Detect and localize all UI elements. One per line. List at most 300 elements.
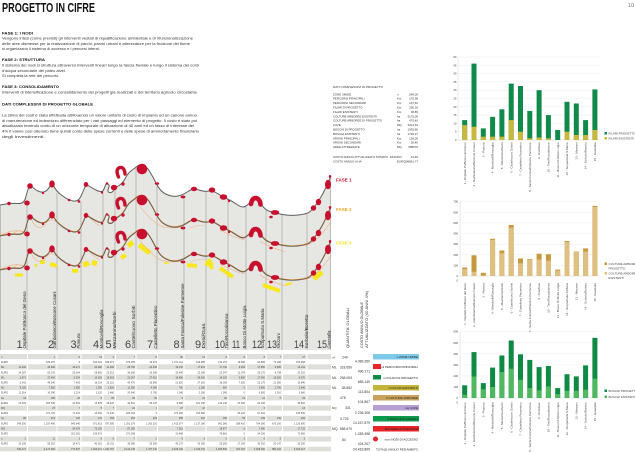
table values: 3.680 (299, 392, 306, 395)
legend: table categories (373, 354, 419, 452)
chart 3 category labels: 1 - Ospitale Po/Bosco del Geso (463, 402, 467, 444)
phase labels (336, 178, 352, 246)
table values: 11 (52, 438, 56, 441)
chart 1 category labels: 10 - Tino/Roccabianca (546, 142, 550, 172)
chart 1 gridlines and axis: 35 (453, 80, 457, 84)
global quantities and costs: 2.236.308 (355, 411, 370, 415)
table values: 3.510 (275, 392, 282, 395)
table values: 1.260 (96, 387, 103, 390)
table values: 78.881 (219, 432, 228, 436)
table values: 3.871 (20, 376, 27, 379)
table values: 101.150 (196, 402, 206, 405)
table values: 1.137.280 (194, 422, 206, 425)
table values: 6 (79, 356, 81, 359)
table values: 784.380 (256, 422, 266, 425)
data table: dati complessivi di progetto: CAVE (333, 123, 341, 127)
table values: 10.840 (297, 382, 306, 384)
global quantities and costs: 558.670 (340, 427, 352, 431)
table values: 254 (131, 417, 136, 420)
table values: 2.640 (299, 387, 306, 390)
table values: 30.120 (237, 412, 246, 415)
table values: 6.820 (259, 392, 266, 395)
text block: dati complessivi: La stima dei costi è stata effettuata attribuendo un valore unitario di costo di impianto ed un canone annuo (2, 114, 197, 118)
table values: 45 (154, 397, 158, 400)
chart 1 legend: FILARI ESISTENTI (608, 136, 634, 140)
table values: 14.460 (94, 412, 103, 415)
table values: 17.732 (297, 427, 306, 430)
data table: dati complessivi di progetto: Km (397, 141, 402, 145)
table values: 2.108.100 (172, 448, 184, 451)
table values: 11.514 (19, 392, 27, 395)
segment names (22, 283, 332, 348)
table values: 24.440 (149, 366, 158, 369)
table values: 71.430 (106, 412, 115, 415)
chart 1 gridlines and axis: 0 (455, 138, 457, 142)
segment numbers: 10 (215, 339, 225, 351)
table values: 120 (76, 417, 81, 420)
table values: 18.360 (219, 382, 228, 384)
table values: EURO (1, 422, 8, 425)
table values: EURO (1, 392, 8, 395)
table values: 73.150 (94, 427, 103, 430)
table values: 55 (242, 417, 246, 420)
table values: 255 (179, 417, 184, 420)
table values: 153 (110, 417, 115, 420)
chart 3 category labels: 14 - Sorbolo/Boretto (584, 402, 588, 429)
table values: EURO (1, 412, 8, 415)
table values: 12 (202, 356, 206, 359)
data table: dati complessivi di progetto: PERCORSI PRINCIPALI (333, 97, 365, 101)
segment names: Guastalla (326, 330, 332, 348)
table values: 130 (277, 417, 282, 420)
table values: 3 (79, 438, 81, 441)
chart 3 category labels: 5 - Mezzanino/Sorbi (500, 402, 504, 429)
table values: 40.470 (127, 382, 136, 384)
table values: 11.078 (238, 371, 246, 374)
segment numbers: 2 (48, 339, 54, 351)
table column headers: ATTUALIZZATO (40 ANNI 4%) (364, 290, 369, 348)
table values: 11.350 (128, 387, 136, 390)
table values: 192.021 (93, 361, 103, 364)
table values: EURO (1, 443, 8, 446)
table values: 1.729.710 (194, 448, 206, 451)
global quantities and costs: ML (332, 366, 337, 370)
segment names: Gainbolanca/Boscone Cusani (52, 291, 57, 348)
table values: 20.210 (297, 371, 306, 374)
global quantities and costs: MQ (332, 406, 337, 410)
table values: ha (1, 397, 4, 400)
data table: dati complessivi di progetto: n (397, 92, 399, 96)
table values: 971.813 (93, 422, 103, 425)
table values: 45.620 (297, 402, 306, 405)
table values: 371.396 (126, 432, 136, 436)
table values: 2.112.139 (124, 448, 136, 451)
text block: fase 1: FASE 1: I NODI (2, 32, 33, 36)
chart 1 legend (604, 132, 635, 140)
table values: 1.071.110 (172, 361, 184, 364)
text block: fase 2 (2, 58, 199, 78)
table values: 5 (101, 407, 103, 410)
segment names: Ospitale Po/Bosco del Geso (22, 291, 27, 348)
chart 3 gridlines and axis (453, 330, 598, 404)
global quantities and costs: 1.283.498 (355, 432, 370, 436)
segment names: Pianura (76, 333, 81, 348)
table values: 27.451 (149, 376, 158, 379)
segment names: Dosi/Gas (201, 324, 206, 348)
table values: 8.320 (20, 387, 27, 390)
chart 1 gridlines and axis: 50 (453, 55, 457, 59)
chart 3 legend (604, 389, 635, 399)
legend: table categories: num NODI DI ACCESSO (385, 438, 419, 442)
chart 2 category labels: 15 - Guastalla (593, 283, 597, 302)
chart 3 category labels: 13 - Mezzani (574, 402, 578, 420)
text block: fase 3: Interventi di intensificazione e consolidamento dei progetti già realizzati e del territorio agricolo circostante (2, 90, 197, 94)
table values: 35.200 (297, 443, 306, 446)
table values: 3 (244, 438, 246, 441)
chart 2 gridlines and axis (453, 200, 598, 282)
table values: 289.410 (236, 422, 246, 425)
table values: 12 (242, 397, 246, 400)
chart 2 category labels: 14 - Sorbolo/Boretto (584, 283, 588, 310)
text block: fase 1 (2, 32, 193, 51)
table values: 35.380 (127, 443, 136, 446)
segment numbers: 8 (173, 339, 180, 351)
data table: dati complessivi di progetto: 24,40 (411, 155, 418, 159)
global quantities and costs: MQ (332, 427, 338, 431)
chart 1 legend: FILARI PROGETTO (608, 132, 635, 136)
segment names: Bosco Di Motte Luigia (242, 305, 247, 348)
table values: 20.200 (257, 402, 266, 405)
table values: 17.100 (237, 443, 246, 446)
table values: 46.072 (149, 361, 158, 364)
global quantities and costs: 3.725 (340, 417, 349, 421)
segment numbers: 3 (70, 339, 77, 351)
table values: 278.355 (126, 361, 136, 364)
table values: 0 (244, 387, 246, 390)
table values: n (1, 438, 3, 441)
table values: 5 (182, 397, 184, 400)
segment numbers: 4 (93, 339, 99, 351)
table values: 600 (223, 387, 228, 390)
table values: 60 (224, 397, 228, 400)
segment names: Mezzanino/Sorbi (112, 311, 117, 348)
segment numbers (16, 339, 327, 351)
table values: 23.170 (257, 382, 266, 384)
table values: 1.029.450 (254, 448, 266, 451)
table values: ML (1, 376, 5, 379)
bar chart: colture arboree (453, 200, 635, 332)
text block: dati complessivi: di manutenzione ed indennizzo differenziato per i vari passaggi ed elemento di progetto. Il costo è stato poi (2, 119, 197, 123)
table values: 1.280 (199, 387, 206, 390)
table values: 2.790 (275, 387, 282, 390)
data table: quantities by segment (0, 352, 331, 452)
table values: 1.263.210 (146, 422, 158, 425)
table values: 25.170 (257, 371, 266, 374)
table column headers: QUANTITA' GLOBALI (345, 308, 350, 348)
table values: 1.495.800 (216, 448, 228, 451)
legend: table categories: TOTALE ANNUO PER AMBITO (376, 448, 419, 452)
global quantities and costs: 38.852 (342, 386, 352, 390)
table values: 229 (153, 417, 158, 420)
segment numbers: 1 (16, 339, 23, 351)
chart 1 category labels: 1 - Ospitale Po/Bosco del Geso (463, 142, 467, 184)
table values: 8 (182, 438, 184, 441)
table values: ML (1, 366, 5, 369)
table values: 1.326.471 (91, 448, 103, 451)
table values: 18.214 (94, 382, 103, 384)
segment numbers: 9 (195, 339, 201, 351)
table values: 7 (113, 407, 115, 410)
table values: 12 (262, 397, 266, 400)
chart 2 gridlines and axis: 500 (453, 221, 458, 225)
table values: 16.680 (175, 376, 184, 379)
table values: 22 (132, 407, 136, 410)
table values: 5 (280, 438, 282, 441)
chart 3 category labels: 6 - Castelnuovo Sorbiti (509, 402, 513, 433)
chart 2 category labels: 3 - Pianura (481, 283, 485, 298)
table values: 2.260 (199, 392, 206, 395)
global quantities and costs: 104.867 (358, 400, 370, 404)
chart 3 category labels: 9 - Dosi/Gas (537, 402, 541, 419)
data table: dati complessivi di progetto: BOSCHI DI PROGETTO (333, 128, 365, 132)
table values: 65.141 (47, 371, 56, 374)
table values: 55.310 (47, 443, 56, 446)
segment names: Castelnuovo Sorbiti (131, 305, 136, 348)
table values: 7 (79, 407, 81, 410)
table stripes (0, 354, 331, 451)
segment names: Monticelli/Roncaglia (99, 309, 104, 348)
text block: fase 1: si organizzano il sistema di accesso e i percorsi interni. (2, 47, 100, 51)
data table: dati complessivi di progetto: 1730,27 (408, 132, 418, 136)
table values: EURO (1, 402, 8, 405)
global quantities and costs: 84 (342, 438, 346, 442)
chart 3 gridlines and axis: 200 (453, 374, 458, 378)
chart 3 bars: boschi esistenti (462, 369, 597, 398)
table values: 7.590 (259, 427, 266, 430)
table values: ML (1, 387, 5, 390)
table values: 10.390 (47, 392, 56, 395)
chart 2 category labels: 9 - Dosi/Gas (537, 283, 541, 300)
table values: 2.480 (108, 392, 115, 395)
table values: 37.010 (197, 382, 206, 384)
chart 2 gridlines and axis: 600 (453, 210, 458, 214)
segment numbers: 14 (294, 339, 304, 351)
table values: 180 (223, 417, 228, 420)
table values: 46.930 (47, 366, 56, 369)
segment numbers: 6 (125, 339, 131, 351)
table values: 7 (280, 356, 282, 359)
table values: 0 (244, 427, 246, 430)
chart 2 bars: colture esistenti (462, 207, 597, 276)
table values: 15.471 (72, 443, 81, 446)
table values: 24 (202, 397, 206, 400)
river profile panel (0, 164, 352, 351)
chart 2 gridlines and axis: 0 (456, 274, 458, 278)
table values: 700 (179, 387, 184, 390)
table values: 22.180 (197, 371, 206, 374)
chart 3 gridlines and axis: 300 (453, 363, 458, 367)
table values: 1.477.311 (146, 448, 158, 451)
global quantities and costs: 685.149 (358, 380, 370, 384)
table values: 21.050 (273, 382, 282, 384)
table values: 37.460 (47, 376, 56, 379)
chart 3 gridlines and axis: 600 (453, 330, 458, 334)
table values: 40.010 (94, 443, 103, 446)
global quantities and costs (332, 356, 370, 452)
chart 3 gridlines and axis: 400 (453, 352, 458, 356)
chart 1 gridlines and axis: 25 (453, 96, 457, 100)
segment names: Mezzani (276, 333, 281, 348)
segment numbers: 12 (252, 339, 262, 351)
data table: dati complessivi di progetto: Km (397, 101, 402, 105)
table values: 28.820 (94, 371, 103, 374)
table values: 8 (101, 438, 103, 441)
table values: 6 (264, 438, 266, 441)
table values: 21.620 (175, 382, 184, 384)
chart 3 category labels: 3 - Pianura (481, 402, 485, 417)
table values: MQ (1, 407, 5, 410)
table values: 85 (23, 417, 27, 420)
chart 1 category labels: 6 - Castelnuovo Sorbiti (509, 142, 513, 173)
global quantities and costs: 496.171 (358, 370, 370, 374)
table values: 172 (98, 417, 103, 420)
table values: 4.060 (151, 387, 158, 390)
text block: dati complessivi: degli investimenti. (2, 135, 45, 139)
chart 1 category labels: 8 - Santa Franca/Polesine Parmense (528, 142, 532, 192)
data table: dati complessivi di progetto: FILARI DI PROGETTO (333, 106, 363, 110)
segment numbers: 15 (317, 339, 327, 351)
data table: dati complessivi di progetto: AREE ATTREZZATE (333, 145, 360, 149)
table values: 48.340 (47, 382, 56, 384)
table values: 6 (204, 438, 206, 441)
data table: dati complessivi di progetto: 475,40 (409, 119, 418, 123)
global quantities and costs: 24.419.809 (353, 448, 370, 452)
table values: EURO (1, 382, 8, 384)
data table: dati complessivi di progetto: Km (397, 136, 402, 140)
chart 3 gridlines and axis: 500 (453, 341, 458, 345)
text block: fase 2: FASE 2: STRUTTURA (2, 58, 45, 62)
table values: EURO (1, 432, 8, 436)
table values: 3 (304, 438, 306, 441)
table values: 673.100 (272, 422, 282, 425)
table values: 1.040 (177, 392, 184, 395)
table values: 2.214 (74, 392, 81, 395)
chart 2 gridlines and axis: 0 (456, 278, 458, 282)
table values: 6 (264, 407, 266, 410)
text block: fase 1: delle aree dismesse per la realizzazione di parchi, parchi urbani e attrezzature per la fruizione del fiume (2, 42, 190, 46)
data table: dati complessivi di progetto: MQ (397, 145, 402, 149)
table values: 31.486 (175, 432, 184, 436)
table values: 16.200 (273, 376, 282, 379)
table values: 71.560 (297, 432, 306, 436)
chart 1 gridlines and axis: 30 (453, 88, 457, 92)
segment numbers: 13 (267, 339, 277, 351)
table values: 1.650 (74, 387, 81, 390)
chart 2 category labels: 4 - Monticelli/Roncaglia (491, 283, 495, 314)
data table: dati complessivi di progetto: 3313,94 (408, 123, 418, 127)
global quantities and costs: ML (332, 386, 337, 390)
text block: dati complessivi: 4% Il valore così ottenuto tiene quindi conto delle spese correnti e delle spese di ammortamento finanziario (2, 130, 199, 134)
segment numbers: 11 (232, 339, 240, 351)
data table: dati complessivi di progetto: 137,40 (409, 101, 418, 105)
chart 2 legend: ESISTENTI (608, 276, 624, 280)
chart 1 category labels (463, 142, 597, 192)
segment names: Santa Franca/Polesine Parmense (180, 283, 185, 348)
data table: dati complessivi di progetto: 240,00 (409, 92, 418, 96)
data table: dati complessivi di progetto: ha (397, 128, 401, 132)
chart 3 category labels: 15 - Guastalla (593, 402, 597, 421)
chart 2 category labels (463, 283, 597, 332)
table values: 17.740 (219, 366, 228, 369)
text block: fase 2: d'acqua secondarie dei paleo alvei. (2, 69, 66, 73)
data table: dati complessivi di progetto: COLTURE ARBOREE DI PROGETTO (333, 119, 383, 123)
chart 1 category labels: 14 - Sorbolo/Boretto (584, 142, 588, 169)
table values: 6 (226, 356, 228, 359)
phase labels: FASE 1 (336, 178, 352, 182)
table values: 220 (301, 417, 306, 420)
table values: 21.315 (18, 402, 27, 405)
table values: 29 (302, 397, 306, 400)
table values: 13.265 (94, 376, 103, 379)
profile line: fase 1 (0, 164, 331, 218)
table values: 331.107 (236, 448, 246, 451)
table values: 7.650 (49, 387, 56, 390)
segment dividers (0, 167, 330, 350)
chart 3 category labels: 10 - Tino/Roccabianca (546, 402, 550, 432)
table values: 8.758 (275, 371, 282, 374)
table values: 26.004 (72, 371, 81, 374)
table values: 1.820 (108, 387, 115, 390)
chart 1 gridlines and axis: 5 (455, 130, 457, 134)
table values: MQ (1, 427, 5, 430)
legend: table categories: ml FILARI DI PROGETTO (383, 376, 419, 380)
table values: 2.127.460 (44, 448, 56, 451)
legend: table categories: ti COLTURE ARBOREE (386, 396, 418, 400)
table values: 11.000 (107, 366, 115, 369)
global quantities and costs: 331 (345, 406, 351, 410)
legend: table categories: ml PERCORSI PRINCIPALI (381, 365, 418, 369)
page number: 10 (628, 3, 634, 9)
text block: dati complessivi (2, 102, 199, 139)
table values: 1.412.077 (172, 422, 184, 425)
chart 1 gridlines and axis: 45 (453, 63, 457, 67)
data table: dati complessivi di progetto: COSTO ANNUO ATTUALIZZATO STIMATO (333, 155, 389, 159)
data table: dati complessivi di progetto: ZONE UMIDE (333, 92, 351, 96)
table values: 26.750 (127, 366, 136, 369)
chart 2 legend (604, 262, 635, 280)
table values: 14 (99, 356, 103, 359)
data table: dati complessivi di progetto: €/H/URO (390, 155, 402, 159)
table values: 20.147 (273, 443, 282, 446)
profile line: fase 3 (0, 229, 331, 286)
table values: 1.126.800 (294, 422, 306, 425)
table values: 9.452 (239, 366, 246, 369)
table values: 5 (101, 397, 103, 400)
global quantities and costs: 318.650 (340, 366, 352, 370)
table values: 6 (113, 438, 115, 441)
table values: 109.985 (196, 361, 206, 364)
table values: 20.247 (219, 371, 228, 374)
table values: 10.100 (18, 443, 27, 446)
table values: 73.180 (273, 361, 282, 364)
chart 2 category labels: 1 - Ospitale Po/Bosco del Geso (463, 283, 467, 325)
segment names: Tino/Roccabianca (224, 313, 229, 348)
table values: 32.490 (175, 371, 184, 374)
table values: 142.157 (218, 361, 228, 364)
table values: 20.221 (106, 382, 115, 384)
table values: 23.312 (106, 371, 115, 374)
table values: 5 (156, 438, 158, 441)
